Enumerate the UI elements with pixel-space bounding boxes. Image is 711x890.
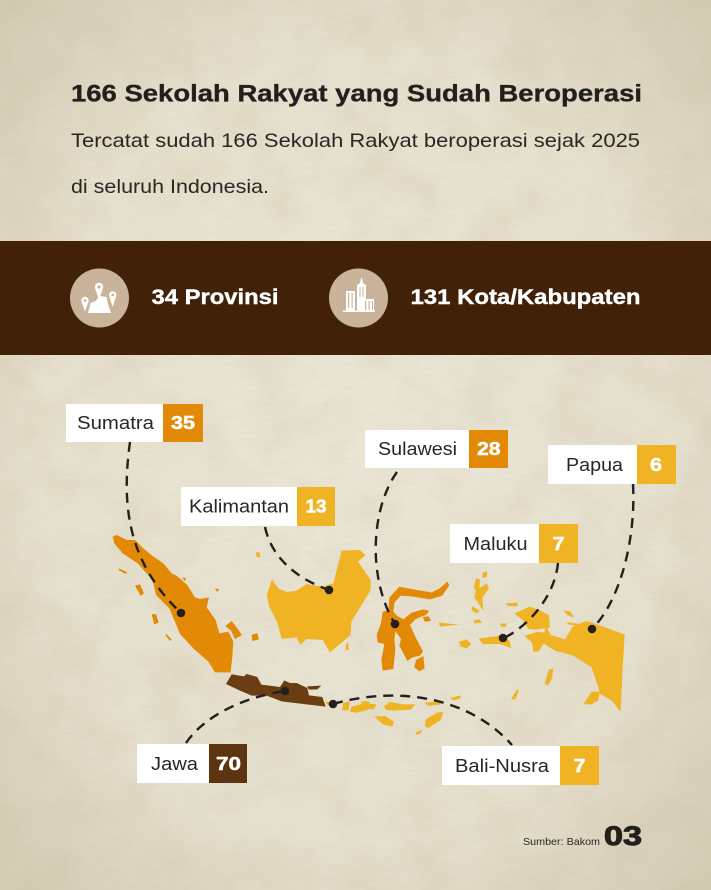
label: Sumatra 35: [66, 404, 203, 442]
intro text: [71, 130, 640, 198]
region: Jawa: [226, 674, 326, 707]
label: Papua 6: 6: [650, 455, 662, 475]
icon: provinces map pins: [70, 268, 129, 328]
label: Papua 6: [548, 445, 676, 484]
label: Sulawesi 28: [365, 430, 508, 468]
icon: city buildings: [329, 268, 388, 328]
label: Maluku 7: Maluku: [464, 534, 528, 554]
region: Nusa Tenggara: [360, 695, 461, 735]
label: Bali-Nusra 7: Bali-Nusra: [455, 756, 550, 776]
connector lines: [127, 442, 633, 745]
label: Bali-Nusra 7: [442, 746, 599, 785]
location dots: [177, 586, 596, 708]
region: Kalimantan: [256, 550, 371, 652]
stat: 131 Kota/Kabupaten: 131 Kota/Kabupaten: [410, 286, 640, 309]
label: Sulawesi 28: Sulawesi: [378, 439, 457, 459]
label: Jawa 70: Jawa: [151, 754, 199, 774]
label: Bali-Nusra 7: 7: [574, 756, 586, 776]
label: Kalimantan 13: 13: [306, 496, 326, 516]
label: Sumatra 35: 35: [171, 413, 195, 433]
region: Sumatra: [113, 535, 259, 672]
intro text: di seluruh Indonesia.: [71, 176, 269, 198]
stat: 34 Provinsi: 34 Provinsi: [152, 286, 278, 309]
title: 166 Sekolah Rakyat yang Sudah Beroperasi: [71, 80, 642, 108]
label: Jawa 70: [137, 744, 247, 783]
region: Maluku and Papua: [439, 571, 625, 712]
page number: 03: [604, 821, 642, 851]
label: Sumatra 35: Sumatra: [77, 413, 155, 433]
label: Maluku 7: 7: [552, 534, 564, 554]
label: Jawa 70: 70: [216, 754, 241, 774]
label: Kalimantan 13: [181, 487, 335, 526]
label: Papua 6: Papua: [566, 455, 624, 475]
label: Kalimantan 13: Kalimantan: [189, 496, 289, 516]
label: Maluku 7: [450, 524, 578, 563]
label: Sulawesi 28: 28: [477, 439, 500, 459]
region: Sulawesi: [377, 582, 449, 671]
intro text: Tercatat sudah 166 Sekolah Rakyat beroperasi sejak 2025: [71, 130, 640, 152]
source note: Sumber: Bakom: [523, 836, 600, 848]
stats band: [0, 241, 711, 355]
map of Indonesia: [113, 535, 625, 735]
